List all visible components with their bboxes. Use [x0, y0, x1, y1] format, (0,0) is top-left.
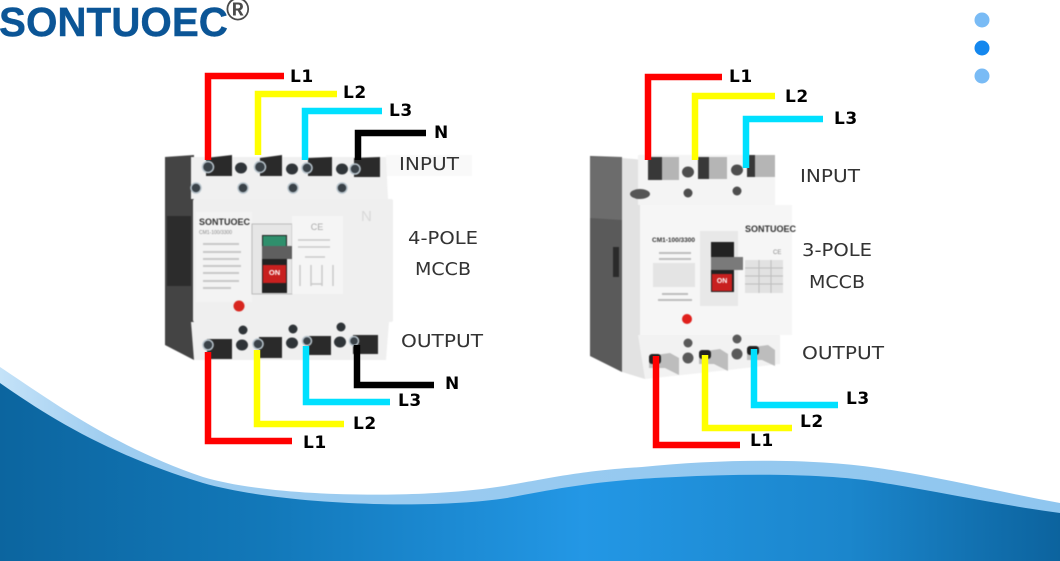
line labels: 3-pole	[729, 67, 870, 451]
N mark: N	[361, 208, 372, 225]
line labels: 4-pole: N	[434, 123, 449, 143]
bottom terminal block	[191, 322, 389, 360]
captions: 3-pole: 3-POLE	[802, 240, 872, 261]
captions: 4-pole: 4-POLE	[408, 228, 478, 249]
3-pole breaker: CE	[773, 250, 781, 256]
line labels: 4-pole	[290, 67, 460, 453]
main cover	[193, 199, 393, 322]
line labels: 4-pole: L3	[389, 101, 413, 121]
top screws	[191, 162, 360, 193]
label backing	[386, 155, 472, 176]
captions: 4-pole: INPUT	[399, 154, 460, 175]
wires: 4-pole input	[208, 76, 426, 160]
wires: 4-pole output	[208, 345, 434, 441]
line labels: 3-pole: L1	[729, 67, 753, 87]
wires: 3-pole output	[656, 349, 838, 445]
4-pole breaker: CM1-100/3300	[199, 230, 232, 236]
logo: SONTUOEC	[0, 0, 228, 45]
line labels: 4-pole: L2	[353, 414, 377, 434]
red indicator	[234, 300, 244, 312]
4-pole breaker: SONTUOEC	[199, 217, 251, 227]
switch housing	[252, 224, 292, 294]
line labels: 4-pole: L2	[343, 83, 367, 103]
bottom terminal block	[638, 335, 780, 379]
line labels: 3-pole: L3	[834, 109, 858, 129]
left label plate	[196, 212, 252, 302]
main cover	[640, 205, 792, 335]
wires: 3-pole input	[648, 77, 823, 168]
line labels: 3-pole: L2	[785, 87, 809, 107]
4-pole breaker	[165, 155, 472, 360]
3-pole breaker: ON	[717, 278, 727, 285]
top terminal block	[638, 155, 775, 205]
captions: 4-pole: MCCB	[415, 259, 471, 280]
line labels: 4-pole: L1	[290, 67, 314, 87]
line labels: 3-pole: L2	[800, 412, 824, 432]
right diagram plate	[292, 216, 343, 294]
captions: 3-pole	[800, 166, 885, 364]
right label: SONTUOEC	[745, 224, 797, 234]
4-pole breaker: CE	[311, 222, 323, 232]
dark side	[165, 155, 194, 360]
pagination dots	[974, 12, 990, 84]
top terminal slots	[206, 155, 380, 177]
captions: 4-pole: OUTPUT	[401, 331, 484, 352]
red indicator	[682, 314, 692, 324]
dark side	[590, 156, 622, 372]
wave background: light band	[0, 367, 1060, 561]
switch housing	[700, 231, 738, 306]
captions: 3-pole: OUTPUT	[802, 343, 885, 364]
line labels: 4-pole: L1	[303, 433, 327, 453]
left label: CM1-100/3300	[652, 237, 695, 244]
wave background: blue field	[0, 383, 1060, 561]
line labels: 4-pole: N	[445, 374, 460, 394]
top terminal block	[191, 157, 388, 199]
captions: 4-pole	[399, 154, 484, 352]
captions: 3-pole: INPUT	[800, 166, 861, 187]
line labels: 4-pole: L3	[398, 391, 422, 411]
top terminal slots	[648, 155, 775, 180]
line labels: 3-pole: L3	[846, 389, 870, 409]
light side	[622, 158, 645, 379]
captions: 3-pole: MCCB	[809, 272, 865, 293]
4-pole breaker: ON	[269, 268, 280, 277]
line labels: 3-pole: L1	[750, 431, 774, 451]
3-pole breaker	[590, 155, 797, 379]
